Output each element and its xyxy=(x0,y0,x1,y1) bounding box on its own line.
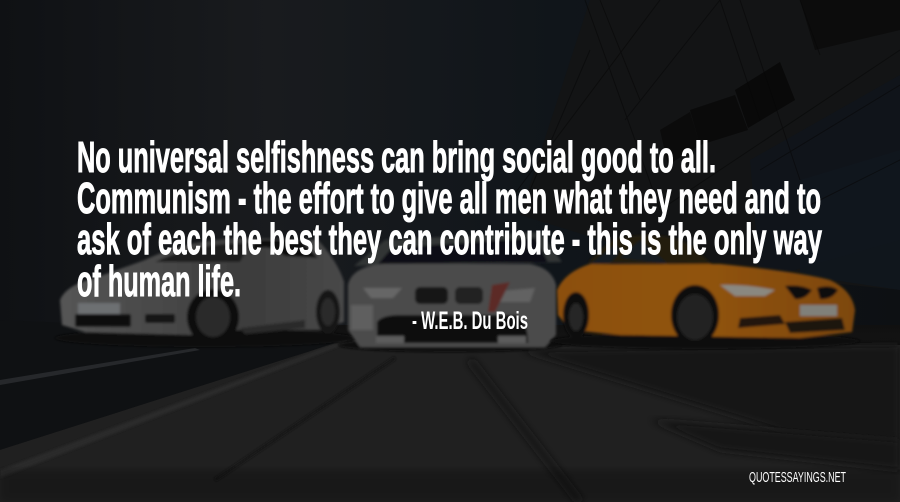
background: building xyxy=(510,0,900,290)
quote text: of human life. xyxy=(77,257,241,306)
left white car xyxy=(55,238,355,347)
background: night sky xyxy=(0,0,900,340)
background: road surface xyxy=(0,320,900,502)
attribution: - W.E.B. Du Bois xyxy=(412,307,528,335)
orange car xyxy=(550,235,860,349)
quote text xyxy=(77,133,822,306)
center race car xyxy=(338,232,562,352)
